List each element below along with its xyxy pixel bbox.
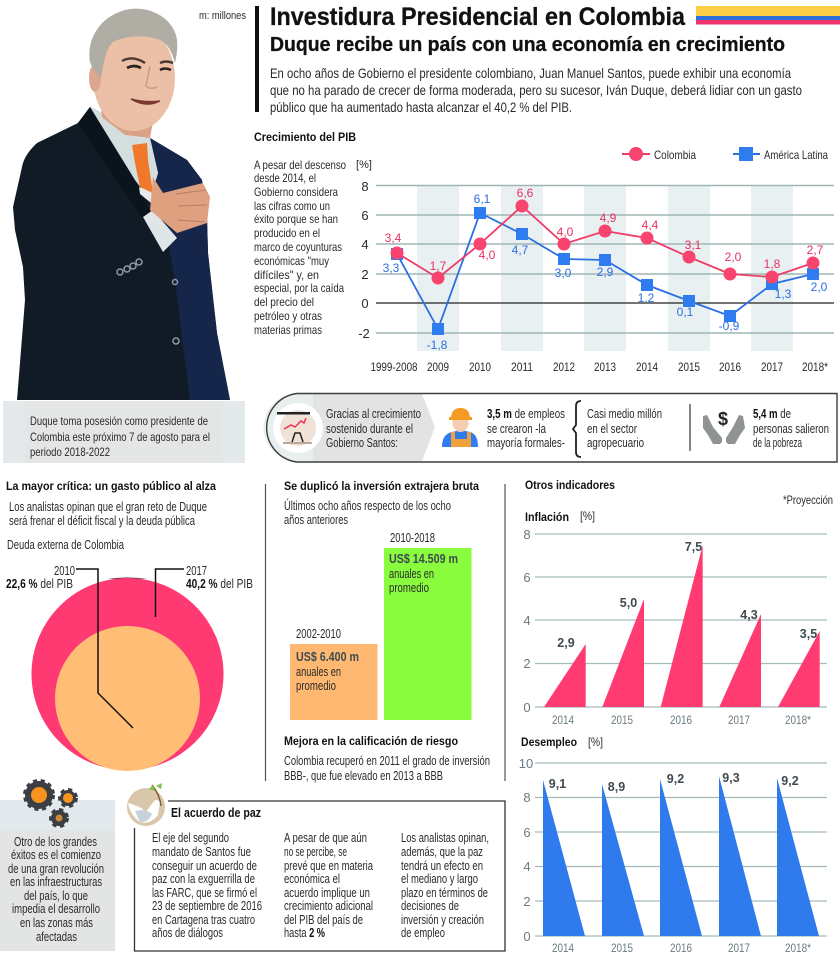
GDP side text: marco de coyunturas xyxy=(254,240,342,254)
column 3 xyxy=(401,831,489,940)
bar: 2002-2010 xyxy=(290,627,378,720)
infrastructure text: en las zonas más xyxy=(20,916,93,930)
triangle chart: inflation xyxy=(523,509,827,727)
triangle chart: inflation: 4 xyxy=(523,613,531,628)
description: Deuda externa de Colombia xyxy=(7,538,124,552)
x axis labels: 2016 xyxy=(719,360,741,374)
infrastructure text: Otro de los grandes xyxy=(14,835,97,849)
x axis labels: 2015 xyxy=(678,360,700,374)
triangle chart: unemployment: 9,2 xyxy=(667,772,684,786)
bar: 2002-2010: 2002-2010 xyxy=(296,627,341,641)
infrastructure text: impedia el desarrollo xyxy=(12,902,100,916)
icon: gears xyxy=(25,781,76,826)
series: América Latina: 3,0 xyxy=(555,266,572,280)
GDP side text: producido en el xyxy=(254,226,320,240)
risk rating text: BBB-, que fue elevado en 2013 a BBB xyxy=(284,769,443,783)
column 2: A pesar de que aún xyxy=(284,831,367,845)
y axis labels: [%] xyxy=(356,159,372,171)
triangle chart: unemployment: 9,3 xyxy=(722,771,740,785)
title: Investidura Presidencial en Colombia xyxy=(270,3,686,31)
triangle chart: inflation: Inflación xyxy=(525,510,569,524)
label: 2010: 2010 xyxy=(54,564,75,578)
triangle chart: inflation: 2017 xyxy=(728,713,750,727)
GDP side text: A pesar del descenso xyxy=(254,158,346,172)
triangle chart: inflation: 2,9 xyxy=(557,636,575,650)
icon: worker xyxy=(442,408,478,447)
triangle chart: unemployment: 4 xyxy=(523,859,531,874)
bar: 2002-2010: US$ 6.400 m xyxy=(296,650,359,664)
infrastructure text: de una gran revolución xyxy=(8,862,104,876)
y axis labels: 8 xyxy=(361,179,369,194)
infrastructure text: afectadas xyxy=(36,930,77,944)
description: Últimos ocho años respecto de los ocho xyxy=(284,498,451,513)
brace xyxy=(573,401,581,457)
stat: jobs: 3,5 m de empleos xyxy=(487,407,565,421)
bar: 2010-2018 xyxy=(384,531,472,720)
column 2: no se percibe, se xyxy=(284,845,347,859)
triangle chart: unemployment: 9,1 xyxy=(549,777,566,791)
triangle chart: inflation: 4,3 xyxy=(740,608,758,622)
icon: hands with dollar xyxy=(703,409,745,444)
triangle chart: unemployment: 8,9 xyxy=(608,780,625,794)
column 1: El eje del segundo xyxy=(152,831,229,845)
x axis labels: 2017 xyxy=(761,360,783,374)
triangle chart: unemployment: 6 xyxy=(523,825,531,840)
series: Colombia: 4,4 xyxy=(642,218,659,232)
heading: other indicators: Otros indicadores xyxy=(525,478,615,492)
subtitle: Duque recibe un país con una economía en crecimiento xyxy=(270,34,785,56)
icon: dove xyxy=(127,783,165,826)
triangle chart: unemployment: 2015 xyxy=(611,941,633,955)
y axis labels xyxy=(356,159,372,341)
triangle chart: inflation: 2018* xyxy=(785,713,811,727)
label: 2017: 40,2 % del PIB xyxy=(186,577,253,591)
column 2: económica el xyxy=(284,872,340,886)
x axis labels: 2012 xyxy=(553,360,575,374)
triangle chart: unemployment: 10 xyxy=(519,756,533,771)
x axis labels: 2009 xyxy=(427,360,449,374)
line chart: GDP growth xyxy=(356,147,834,374)
panel: public spending xyxy=(6,479,253,771)
x axis labels: 2014 xyxy=(636,360,658,374)
heading: Se duplicó la inversión extrajera bruta xyxy=(284,479,479,493)
series: América Latina: 2,9 xyxy=(597,265,614,279)
photo caption: periodo 2018-2022 xyxy=(30,445,110,459)
series: Colombia: 4,9 xyxy=(600,211,617,225)
bar: 2010-2018: 2010-2018 xyxy=(390,531,435,545)
column 2: crecimiento adicional xyxy=(284,899,373,913)
series: América Latina: 1,3 xyxy=(775,287,792,301)
column 3: además, que la paz xyxy=(401,845,483,859)
infrastructure text: éxitos es el comienzo xyxy=(11,848,101,862)
infrastructure text xyxy=(8,835,104,944)
label: 2017 xyxy=(186,564,253,591)
triangle chart: unemployment: [%] xyxy=(588,735,603,749)
GDP side text: petróleo y otras xyxy=(254,309,322,323)
series: Colombia: 1,7 xyxy=(430,259,447,273)
x axis labels: 2010 xyxy=(469,360,491,374)
legend: Colombia xyxy=(654,148,696,162)
heading: La mayor crítica: un gasto público al alza xyxy=(6,479,216,493)
column 3: plazo en términos de xyxy=(401,886,488,900)
triangle chart: unemployment: 2016 xyxy=(670,941,692,955)
units note: m: millones xyxy=(199,10,246,22)
stat: poverty xyxy=(753,407,829,450)
column 3: de empleo xyxy=(401,926,445,940)
GDP side text: Gobierno considera xyxy=(254,185,338,199)
triangle chart: inflation: 2 xyxy=(523,656,531,671)
triangle chart: inflation: 2014 xyxy=(552,713,574,727)
triangle chart: inflation: [%] xyxy=(580,509,595,523)
y axis labels: -2 xyxy=(358,326,370,341)
description: Los analistas opinan que el gran reto de Duque xyxy=(9,500,207,514)
triangle chart: unemployment xyxy=(519,735,827,955)
GDP side text: desde 2014, el xyxy=(254,171,316,185)
triangle chart: inflation: 8 xyxy=(523,527,531,542)
x axis labels: 2018* xyxy=(802,360,828,374)
triangle chart: inflation: 0 xyxy=(523,700,531,715)
GDP side text: éxito porque se han xyxy=(254,212,338,226)
triangle chart: unemployment: 2018* xyxy=(785,941,811,955)
subheading: risk rating: Mejora en la calificación de riesgo xyxy=(284,734,458,748)
column 2: del PIB del país de xyxy=(284,913,363,927)
series: Colombia: 2,7 xyxy=(807,243,824,257)
x axis labels: 1999-2008 xyxy=(370,360,418,374)
GDP side text: especial, por la caída xyxy=(254,281,344,295)
series: América Latina: 0,1 xyxy=(677,305,694,319)
series: Colombia: 3,4 xyxy=(385,231,402,245)
triangle chart: inflation: 2015 xyxy=(611,713,633,727)
series: Colombia: 2,0 xyxy=(725,250,742,264)
triangle chart: unemployment: 0 xyxy=(523,929,531,944)
series: América Latina: 2,0 xyxy=(811,280,828,294)
stat: jobs xyxy=(487,407,565,450)
column 1: años de diálogos xyxy=(152,926,223,940)
column 2 xyxy=(284,831,373,940)
column 3: inversión y creación xyxy=(401,913,484,927)
column 2: hasta 2 % xyxy=(284,926,325,940)
stat: jobs: se crearon -la xyxy=(487,422,546,436)
x axis labels xyxy=(370,360,828,374)
column 1: 23 de septiembre de 2016 xyxy=(152,899,262,913)
bar: 2010-2018: anuales en xyxy=(389,567,434,581)
bar: 2002-2010: anuales en xyxy=(296,665,341,679)
bar: 2010-2018: promedio xyxy=(389,581,429,595)
triangle chart: unemployment: 9,2 xyxy=(781,774,799,788)
series: Colombia: 4,0 xyxy=(479,248,496,262)
icon: hands with dollar: $ xyxy=(718,409,728,429)
series: América Latina xyxy=(383,192,828,352)
x axis labels: 2011 xyxy=(511,360,533,374)
series: América Latina: 1,2 xyxy=(638,291,655,305)
column 1: conseguir un acuerdo de xyxy=(152,859,257,873)
description: años anteriores xyxy=(284,513,348,527)
description xyxy=(7,500,207,552)
y axis labels: 2 xyxy=(361,267,369,282)
triangle chart: inflation: 6 xyxy=(523,570,531,585)
header xyxy=(255,3,802,115)
infrastructure text: del país, lo que xyxy=(24,889,88,903)
photo caption: Duque toma posesión como presidente de xyxy=(30,414,208,428)
series: América Latina: -0,9 xyxy=(719,319,740,333)
stat: jobs: mayoría formales- xyxy=(487,436,565,450)
series: América Latina: 3,3 xyxy=(383,261,400,275)
y axis labels: 0 xyxy=(361,296,369,311)
column 3: tendrá un efecto en xyxy=(401,859,483,873)
column 1: las FARC, que se firmó el xyxy=(152,886,257,900)
icon: presentation board xyxy=(273,403,323,453)
description: será frenar el déficit fiscal y la deuda pública xyxy=(9,514,195,528)
series: Colombia: 3,1 xyxy=(685,238,702,252)
column 2: acuerdo implique un xyxy=(284,886,370,900)
series: Colombia: 6,6 xyxy=(517,186,534,200)
photo caption xyxy=(3,401,245,463)
heading: El acuerdo de paz xyxy=(171,806,261,820)
panel: peace agreement xyxy=(127,783,505,951)
series: Colombia: 1,8 xyxy=(764,257,781,271)
column 3: el mediano y largo xyxy=(401,872,478,886)
stat: agriculture xyxy=(587,407,662,450)
banner lead text xyxy=(326,407,421,450)
circle chart: external debt xyxy=(32,569,224,771)
GDP side text: económicas "muy xyxy=(254,254,329,268)
label: 2017: 2017 xyxy=(186,564,207,578)
triangle chart: inflation: 2016 xyxy=(670,713,692,727)
stat: poverty: de la pobreza xyxy=(753,436,802,450)
stat: agriculture: en el sector xyxy=(587,422,637,436)
series: América Latina: -1,8 xyxy=(427,338,448,352)
stat: agriculture: Casi medio millón xyxy=(587,407,662,421)
GDP side text: las cifras como un xyxy=(254,199,330,213)
intro text xyxy=(270,65,802,115)
GDP side text: del precio del xyxy=(254,295,314,309)
bar: 2002-2010: promedio xyxy=(296,679,336,693)
stat: agriculture: agropecuario xyxy=(587,436,644,450)
icon: Colombian flag xyxy=(696,6,840,24)
photo: Iván Duque xyxy=(13,9,230,400)
column 1: mandato de Santos fue xyxy=(152,845,251,859)
x axis labels: 2013 xyxy=(594,360,616,374)
risk rating text: Colombia recuperó en 2011 el grado de inversión xyxy=(284,754,490,768)
stat: poverty: 5,4 m de xyxy=(753,407,791,421)
GDP side text: materias primas xyxy=(254,323,322,337)
banner lead text: Gobierno Santos: xyxy=(326,436,398,450)
series: América Latina: 4,7 xyxy=(512,243,529,257)
triangle chart: inflation: 3,5 xyxy=(800,627,817,641)
triangle chart: unemployment: Desempleo xyxy=(521,735,577,749)
photo caption: Colombia este próximo 7 de agosto para el xyxy=(30,430,210,444)
label: 2010 xyxy=(6,564,75,591)
triangle chart: unemployment: 2 xyxy=(523,894,531,909)
banner lead text: sostenido durante el xyxy=(326,422,413,436)
GDP side text: difíciles" y, en xyxy=(254,268,319,282)
series: Colombia xyxy=(385,186,824,284)
y axis labels: 4 xyxy=(361,237,369,252)
bar: 2010-2018: US$ 14.509 m xyxy=(389,552,458,566)
column 1 xyxy=(152,831,262,940)
triangle chart: inflation: 7,5 xyxy=(685,540,702,554)
description xyxy=(284,498,451,527)
risk rating text xyxy=(284,754,490,783)
column 1: paz con la exguerrilla de xyxy=(152,872,255,886)
panel: infrastructure xyxy=(0,781,115,951)
panel: foreign investment xyxy=(284,479,490,783)
GDP side text xyxy=(254,158,346,337)
infrastructure text: en las infraestructuras xyxy=(10,875,102,889)
intro text: público que ha aumentado hasta alcanzar el 40,2 % del PIB. xyxy=(270,99,572,115)
column 2: prevé que en materia xyxy=(284,859,373,873)
y axis labels: 6 xyxy=(361,208,369,223)
series: América Latina: 6,1 xyxy=(474,192,491,206)
legend xyxy=(622,147,828,162)
triangle chart: unemployment: 8 xyxy=(523,790,531,805)
column 1: en Cartagena tras cuatro xyxy=(152,913,255,927)
label: 2010: 22,6 % del PIB xyxy=(6,577,73,591)
banner lead text: Gracias al crecimiento xyxy=(326,407,421,421)
triangle chart: unemployment: 2014 xyxy=(552,941,574,955)
column 3: decisiones de xyxy=(401,899,459,913)
series: Colombia: 4,0 xyxy=(557,225,574,239)
triangle chart: inflation: 5,0 xyxy=(620,596,637,610)
heading: GDP growth: Crecimiento del PIB xyxy=(254,130,356,144)
triangle chart: unemployment: 2017 xyxy=(728,941,750,955)
panel: growth banner xyxy=(264,394,837,462)
column 3: Los analistas opinan, xyxy=(401,831,489,845)
